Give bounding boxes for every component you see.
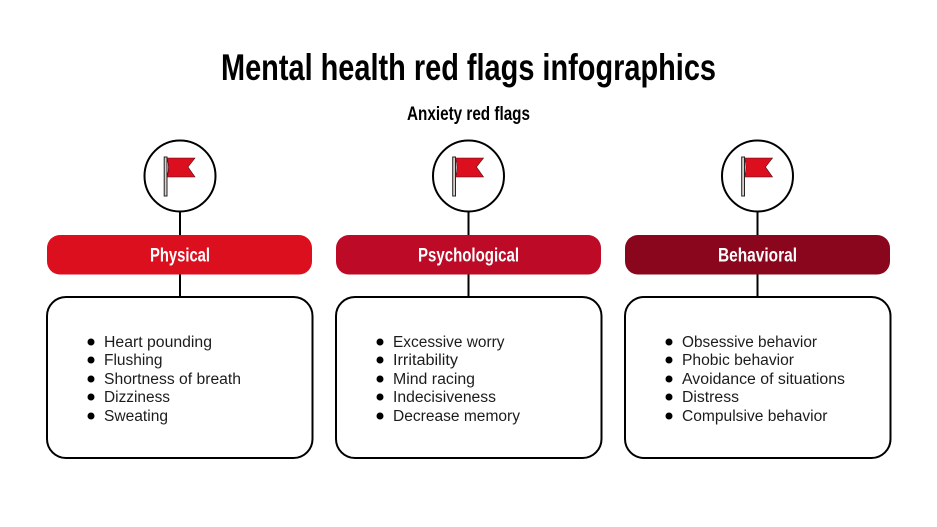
connector lines: psychological: [468, 211, 470, 297]
heading: psychological: Psychological: [418, 246, 519, 266]
list card: behavioral: Compulsive behavior: [682, 408, 828, 425]
list card: behavioral: Distress: [682, 389, 739, 406]
connector lines: physical: [179, 211, 181, 297]
panel: behavioral: [625, 140, 890, 458]
list card: psychological: Irritability: [393, 352, 458, 369]
list card: physical: Shortness of breath: [104, 371, 241, 388]
list card: physical: Flushing: [104, 352, 162, 369]
subtitle: Anxiety red flags: [407, 104, 530, 125]
list card: psychological: [336, 297, 602, 458]
list card: psychological: Decrease memory: [393, 408, 520, 425]
list card: physical: Dizziness: [104, 389, 170, 406]
list card: behavioral: Obsessive behavior: [682, 334, 817, 351]
heading: behavioral: Behavioral: [718, 246, 797, 266]
list card: physical: [47, 297, 312, 458]
heading: psychological: [336, 235, 601, 274]
title: Mental health red flags infographics: [221, 47, 716, 88]
panel: psychological: [336, 140, 602, 458]
list card: behavioral: [625, 297, 890, 458]
icon: behavioral flag: [722, 140, 793, 212]
list card: physical: Sweating: [104, 408, 168, 425]
list card: physical: Heart pounding: [104, 334, 212, 351]
heading: physical: [47, 235, 312, 274]
panel: physical: [47, 140, 312, 458]
list card: psychological: Indecisiveness: [393, 389, 496, 406]
list card: psychological: Mind racing: [393, 371, 475, 388]
icon: physical flag: [144, 140, 216, 212]
list card: behavioral: Avoidance of situations: [682, 371, 845, 388]
list card: psychological: Excessive worry: [393, 334, 505, 351]
heading: physical: Physical: [150, 246, 210, 266]
heading: behavioral: [625, 235, 890, 274]
icon: psychological flag: [433, 140, 504, 212]
list card: behavioral: Phobic behavior: [682, 352, 794, 369]
connector lines: behavioral: [756, 211, 758, 297]
